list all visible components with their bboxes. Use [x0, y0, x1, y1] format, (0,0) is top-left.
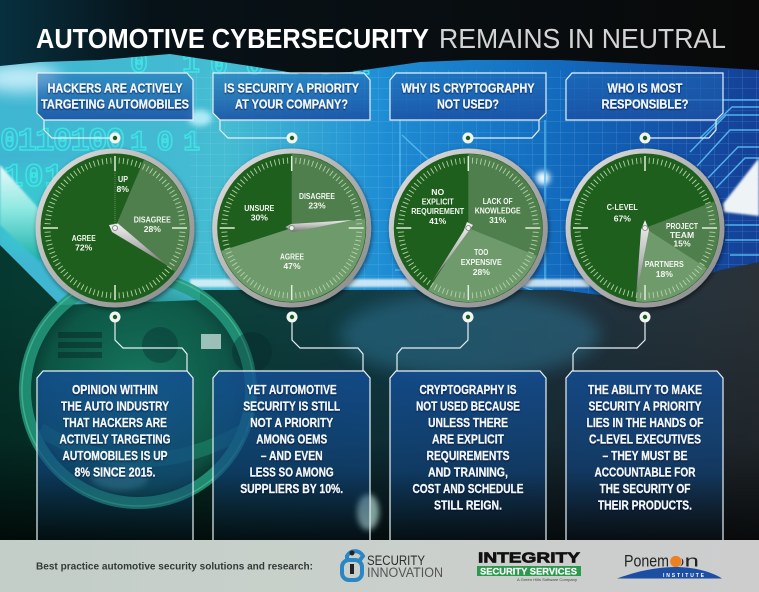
connector: heading 3 to gauge 3 [462, 120, 539, 144]
panel: text box 1: 8% SINCE 2015. [74, 466, 156, 480]
gauge 1 labels: UP [118, 174, 128, 184]
panel: text box 1: OPINION WITHIN [72, 383, 158, 397]
gauge 4: who is most responsible [566, 148, 724, 308]
logo: Security Innovation: SECURITY [367, 553, 425, 568]
logo: Security Innovation [342, 550, 443, 580]
background: digital windshield and car interior: 00101 [210, 50, 370, 84]
background: digital windshield and car interior: 0110100 [0, 123, 125, 160]
gauge 3 needle [432, 222, 473, 282]
panel: text box 2: YET AUTOMOTIVE [247, 383, 337, 397]
panel: question 4 heading [566, 73, 723, 120]
gauge 1 needle [109, 224, 167, 265]
panel: question 3 heading: WHY IS CRYPTOGRAPHY [402, 82, 535, 96]
panel: text box 3: CRYPTOGRAPHY IS [420, 383, 516, 397]
gauge 3 labels: 41% [429, 216, 447, 226]
panel: text box 3: UNLESS THERE [428, 416, 508, 430]
panel: question 1 heading: TARGETING AUTOMOBILES [41, 98, 189, 112]
panel: question 3 heading [390, 73, 546, 120]
title: REMAINS IN NEUTRAL [439, 23, 726, 54]
panel: text box 2: LESS SO AMONG [250, 466, 334, 480]
panel: question 2 heading: IS SECURITY A PRIORITY [224, 82, 360, 96]
gauge 3 labels: TOO [474, 247, 489, 257]
panel: text box 3: ARE EXPLICIT [432, 432, 504, 446]
panel: question 3 heading: NOT USED? [437, 98, 499, 112]
gauge 2: security priority [212, 148, 371, 308]
panel: text box 4: C-LEVEL EXECUTIVES [589, 432, 701, 446]
panel: question 1 heading [37, 73, 193, 120]
panel: text box 2: SUPPLIERS BY 10%. [240, 482, 343, 496]
gauge 2 labels: AGREE [280, 252, 304, 262]
connector: heading 1 to gauge 1 [44, 120, 120, 144]
logo: Integrity Security Services: SECURITY SERVICES [480, 566, 577, 576]
gauge 3: why cryptography not used [389, 148, 548, 308]
gauge 3 labels: EXPENSIVE [461, 257, 502, 267]
logo: Ponemon Institute: on [670, 552, 699, 570]
panel: text box 3: STILL REIGN. [434, 498, 502, 512]
gauge 3 labels: NO [431, 187, 444, 197]
connector: gauge 2 to text box 2 [286, 312, 363, 371]
gauge 4 labels: TEAM [670, 230, 694, 240]
panel: text box 4: THE ABILITY TO MAKE [588, 383, 702, 397]
background: digital windshield and car interior: 01 [130, 48, 200, 82]
panel: text box 1: THAT HACKERS ARE [63, 416, 167, 430]
gauge 2 labels: 23% [308, 200, 326, 210]
gauge 4 labels: PROJECT [666, 221, 699, 231]
gauge 1 labels: 72% [75, 242, 93, 252]
gauge 1 labels: AGREE [72, 233, 96, 243]
footer text: Best practice automotive security solutions and research: [36, 560, 313, 572]
gauge 3 labels: REQUIREMENT [411, 206, 465, 216]
logo: Ponemon Institute: Ponem [624, 552, 669, 570]
panel: text box 4: THE SECURITY OF [600, 482, 691, 496]
panel: text box 1: ACTIVELY TARGETING [60, 432, 170, 446]
gauge 4 labels: C-LEVEL [607, 202, 638, 212]
gauge 4 labels: 15% [673, 238, 691, 248]
connector: gauge 1 to text box 1 [110, 312, 187, 371]
gauge 3 labels [411, 187, 521, 277]
gauge 1 labels: DISAGREE [134, 214, 171, 224]
gauge 4 needle [636, 220, 649, 297]
connector: gauge 4 to text box 4 [573, 312, 650, 371]
panel: text box 3: AND TRAINING, [428, 466, 508, 480]
panel: text box 2: SECURITY IS STILL [243, 400, 341, 414]
logo: Integrity Security Services [477, 550, 581, 582]
panel: text box 4: – THEY MUST BE [602, 449, 688, 463]
gauge 3 labels: EXPLICIT [422, 196, 454, 206]
panel: text box 2 [213, 371, 370, 540]
gauge 4 labels: 18% [656, 269, 673, 279]
gauge 3 labels: 31% [489, 215, 507, 225]
background: digital windshield and car interior: 10100 [4, 159, 104, 196]
gauge 3 labels: KNOWLEDGE [475, 206, 521, 216]
footer band [0, 540, 759, 592]
panel: text box 4: ACCOUNTABLE FOR [594, 466, 696, 480]
logo: Security Innovation: INNOVATION [367, 565, 443, 580]
panel: text box 4: SECURITY A PRIORITY [588, 400, 702, 414]
panel: text box 3: COST AND SCHEDULE [412, 482, 524, 496]
title [36, 23, 726, 54]
panel: text box 4 [566, 371, 723, 540]
panel: text box 3: NOT USED BECAUSE [416, 400, 520, 414]
gauge 2 needle [286, 220, 353, 232]
panel: text box 2: NOT A PRIORITY [250, 416, 334, 430]
gauge 4 labels: PARTNERS [645, 259, 684, 269]
gauge 4 labels: 67% [614, 214, 631, 224]
gauge 3 labels: 28% [473, 267, 490, 277]
logo: Integrity Security Services: INTEGRITY [478, 550, 580, 566]
connector: heading 4 to gauge 4 [640, 120, 716, 144]
gauge 2 labels [244, 191, 335, 271]
gauge 1 labels: 8% [116, 184, 129, 194]
title: AUTOMOTIVE CYBERSECURITY [36, 23, 429, 54]
gauge 2 labels: DISAGREE [299, 191, 335, 201]
panel: question 2 heading [213, 73, 370, 120]
gauge 1 labels [72, 174, 171, 252]
panel: question 2 heading: AT YOUR COMPANY? [235, 98, 348, 112]
panel: text box 4: LIES IN THE HANDS OF [586, 416, 704, 430]
connector: heading 2 to gauge 2 [220, 120, 298, 144]
panel: text box 1 [37, 371, 193, 540]
gauge 3 labels: LACK OF [483, 196, 513, 206]
panel: text box 1: AUTOMOBILES IS UP [62, 449, 168, 463]
logo: Ponemon Institute [617, 552, 722, 579]
gauge 1 labels: 28% [144, 224, 161, 234]
connector: gauge 3 to text box 3 [397, 312, 474, 371]
panel: text box 4: THEIR PRODUCTS. [598, 498, 692, 512]
gauge 2 labels: 30% [251, 212, 268, 222]
panel: text box 2: – AND EVEN [261, 449, 323, 463]
gauge 4 labels [607, 202, 699, 279]
logo: Ponemon Institute: INSTITUTE [663, 573, 705, 579]
gauge 2 labels: 47% [283, 261, 301, 271]
panel: text box 1: THE AUTO INDUSTRY [61, 400, 170, 414]
panel: text box 3 [390, 371, 546, 540]
background: digital windshield and car interior: 101 [130, 128, 200, 159]
panel: text box 2: AMONG OEMS [256, 432, 327, 446]
gauge 2 labels: UNSURE [244, 203, 275, 213]
gauge 1: hackers targeting automobiles [36, 148, 194, 308]
logo: Integrity Security Services: A Green Hills Software Company [517, 578, 577, 582]
panel: question 4 heading: RESPONSIBLE? [602, 98, 688, 112]
panel: question 1 heading: HACKERS ARE ACTIVELY [48, 82, 183, 96]
panel: question 4 heading: WHO IS MOST [608, 82, 683, 96]
panel: text box 3: REQUIREMENTS [426, 449, 510, 463]
